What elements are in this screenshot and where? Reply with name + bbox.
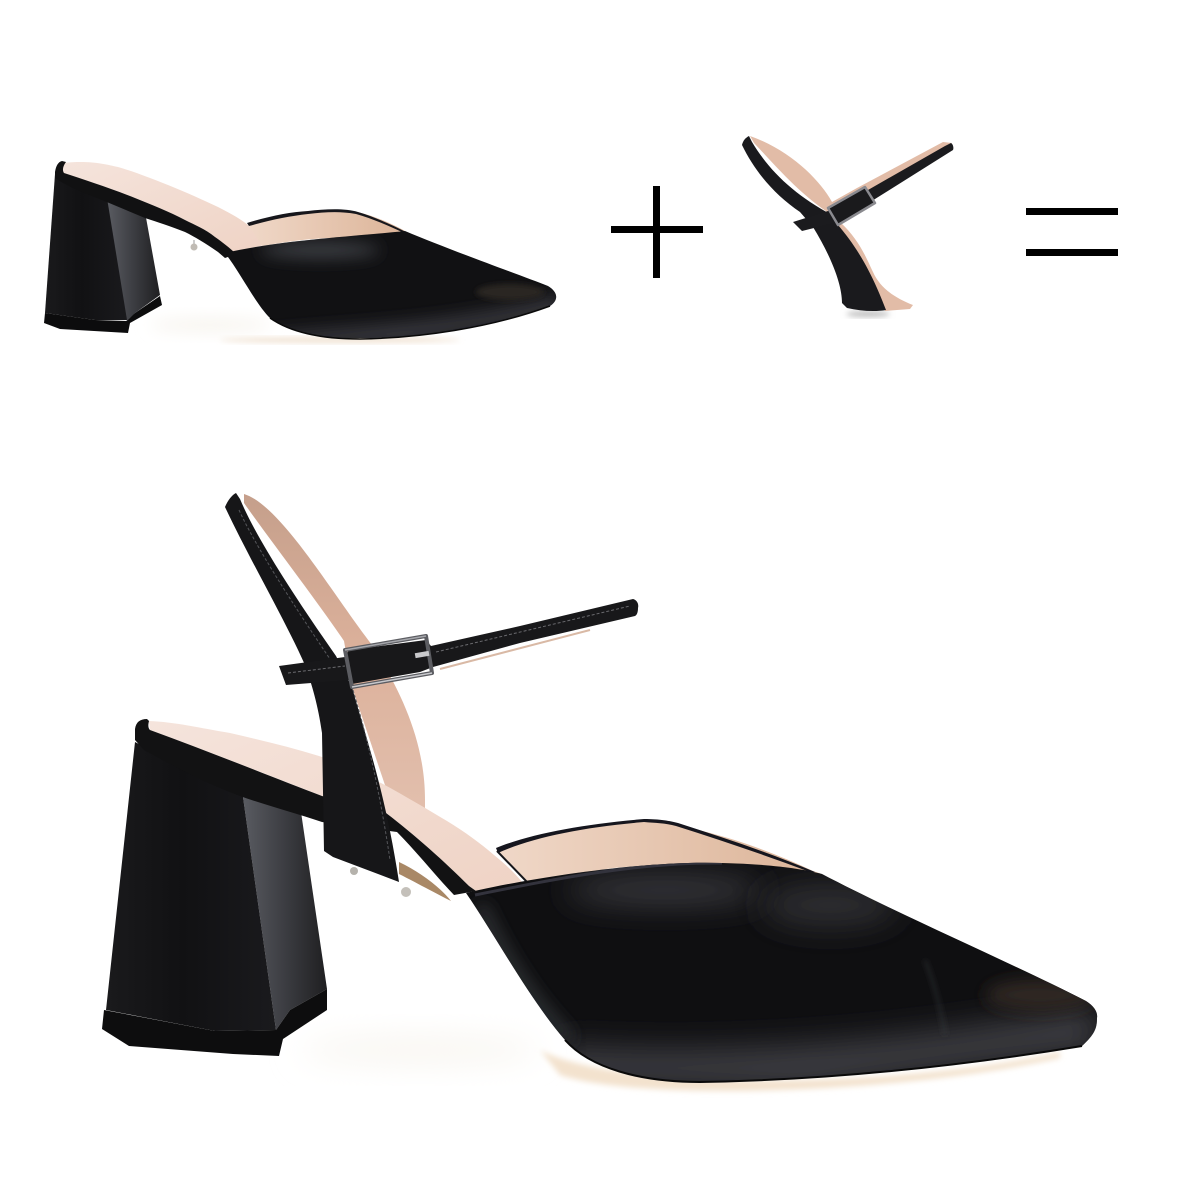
sole band [135, 719, 476, 895]
strap lining [750, 136, 952, 311]
block heel [106, 742, 276, 1031]
mule pin [190, 240, 198, 250]
heel inner face [242, 790, 327, 1030]
vamp sole line [565, 1040, 1082, 1082]
top mule shoe [44, 161, 565, 345]
mule block heel [45, 174, 127, 320]
mule insole [62, 162, 265, 252]
mule sole line [270, 306, 550, 339]
mule heel lip [44, 296, 162, 333]
insole [149, 721, 522, 891]
plus sign [611, 186, 703, 278]
mule vamp [228, 231, 556, 338]
mule inner lining [248, 210, 405, 246]
main vamp [460, 855, 1105, 1090]
vamp rim [496, 819, 815, 872]
equals sign [1026, 208, 1118, 256]
mule lining rim [247, 209, 406, 232]
strap accessory [742, 136, 953, 317]
large slingback shoe [102, 493, 1105, 1091]
strap rear band [742, 136, 886, 311]
back strap lining [244, 494, 425, 812]
ankle strap [793, 143, 953, 231]
heel lip [102, 989, 327, 1056]
buckle [345, 636, 432, 687]
pin details [350, 867, 411, 897]
ankle strap [279, 599, 638, 685]
inner lining of vamp [496, 821, 822, 881]
vertical strap [225, 493, 399, 882]
infographic canvas [44, 136, 1118, 1094]
metal hardware [399, 862, 451, 901]
strap buckle [828, 187, 875, 225]
mule sole band [55, 161, 236, 258]
mule heel face [107, 200, 160, 323]
